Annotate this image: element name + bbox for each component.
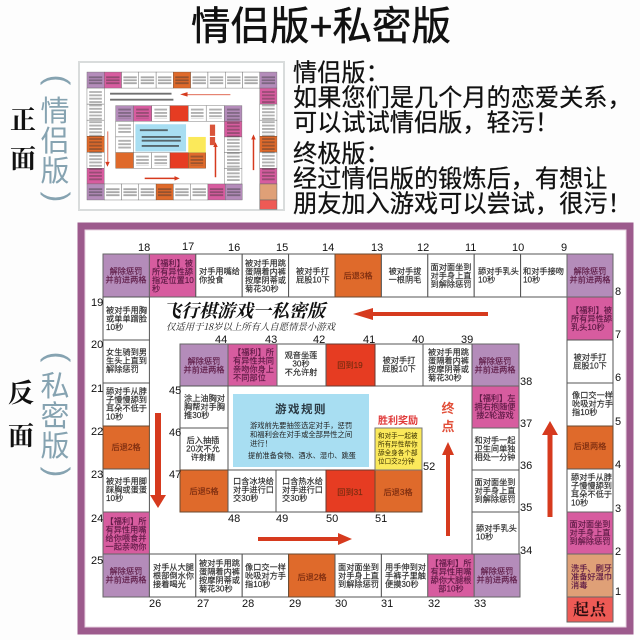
cell 35 [472,470,532,514]
cell 18: 解除惩罚 [110,266,142,276]
cell 47: 后退5格 [189,486,219,496]
cell 15: 菊花30秒 [245,284,279,294]
cell 12: 被对手拔 [389,266,421,276]
cell 34: 10秒 [476,532,493,542]
cell 52: victory reward [375,428,435,473]
label: couple edition vertical: 侣 [40,125,70,158]
cell 15 [242,242,289,297]
board title: 飞行棋游戏一私密版 [163,297,328,323]
cell 3: 10秒 [571,498,588,508]
cell 10 [474,242,524,297]
arrow: top leftward [353,308,488,320]
arrow: right upward [542,421,558,517]
panel: game rules: 进行！ [250,439,272,448]
cell 24: 24 [91,513,103,525]
cell 49: 49 [276,513,288,525]
cell 24: 一起亲吻你 [106,542,146,552]
arrow: left downward [150,413,166,508]
cell 21: 耳朵不低于 [106,403,147,413]
cell 3: 子慢慢舔到 [571,480,612,490]
cell 35: 对手身上直 [475,486,515,496]
cell 2: 到解除惩罚 [570,536,610,546]
cell 35: 面对面坐到 [475,477,515,487]
cell 39: 被对手用跳 [428,347,469,357]
cell 19: 被对手用胸 [106,305,147,315]
cell 27: 27 [197,598,209,610]
cell 7: 乳头10秒 [571,322,605,332]
cell 25: 解除惩罚 [110,566,142,576]
cell 45: 45 [169,385,181,397]
cell 2 [567,512,621,558]
cell 23: 被对手用脚 [106,476,147,486]
cell 20: 生头上直到 [106,356,147,366]
cell 34: 34 [520,545,532,557]
cell 19: 19 [91,297,103,309]
cell 36: 36 [520,460,532,472]
cell 28: 指10秒 [245,579,270,589]
cell 6 [567,340,621,384]
cell 1: 准备好湿巾 [571,572,612,582]
cell 12: 12 [417,242,429,254]
cell 29: 29 [289,598,301,610]
cell 34: 舔对手乳头 [476,523,517,533]
cell 24: 【福利】所 [106,516,146,526]
cell 1 [567,554,621,598]
cell 26: 接着喝光 [153,579,186,589]
cell 28: 吮吸对方手 [245,570,286,580]
cell 33: 33 [474,598,486,610]
arrow: bottom rightward [258,533,352,545]
cell 39 [423,334,473,386]
cell 31: 手裤子里触 [385,570,426,580]
cell 27: 按摩阴蒂或 [199,575,240,585]
cell 21: 舔对手从脖 [106,386,147,396]
cell 4: 4 [615,459,621,471]
cell 46 [169,427,228,470]
cell 35: 35 [520,502,532,514]
cell 35: 到解除惩罚 [475,494,515,504]
cell 48: 交30秒 [233,493,258,503]
cell 10: 10秒 [478,274,495,284]
text block: ultimate edition description: 朋友加入游戏可以尝试，很污！ [293,191,632,218]
cell 41 [326,334,375,386]
cell 26: 26 [149,598,161,610]
cell 50: 回到31 [337,488,363,497]
cell 45 [169,385,228,428]
cell 16: 你投食 [199,274,224,284]
cell 25: 25 [91,555,103,567]
cell 33: 解除惩罚 [481,566,513,576]
cell 48: 48 [228,513,240,525]
cell 3: 舔对手从脖 [571,472,612,482]
cell 8: 并前进两格 [570,274,610,284]
cell 15: 按摩阴蒂或 [245,275,286,285]
cell 32: 【福利】所 [431,558,471,568]
panel: thumbnail of couple edition board [79,62,284,210]
label: back side [8,379,34,451]
cell 49: 交30秒 [282,493,307,503]
label: private edition vertical [40,352,76,477]
cell 11: 对手身上直 [431,270,471,280]
cell 26: 根部倒水你 [153,570,194,580]
cell 52: victory reward: 所有异性帮你 [378,440,418,448]
cell 23: 踩胸或蛋蛋 [106,484,147,494]
cell 44 [180,334,228,386]
cell 30: 对手身上直 [338,570,379,580]
cell 12 [381,242,429,297]
cell 22 [91,426,149,469]
cell 11 [428,242,476,297]
label: couple edition vertical [40,75,76,202]
cell 30 [335,554,381,610]
text block: couple edition description: 如果您们是几个月的恋爱关系， [293,85,632,112]
cell 27: 菊花30秒 [199,584,233,594]
cell 34 [472,512,532,557]
cell 51 [375,470,422,525]
cell 6: 屁股10下 [573,362,607,370]
cell 16: 16 [228,242,240,254]
cell 29: 后退2格 [297,572,327,582]
cell 10: 舔对手乳头 [478,266,519,276]
cell 14 [289,242,335,297]
cell 32: 有异性用嘴 [431,566,471,576]
cell 3: 3 [615,503,621,515]
text block: ultimate edition description: 终极版： [293,141,390,168]
cell 46: 许射精 [191,452,215,462]
cell 21: 子慢慢舔到 [106,394,147,404]
cell 19 [91,297,149,340]
cell 40: 被对手打 [383,355,415,365]
label: private edition vertical: ) [40,467,76,477]
cell 23: 23 [91,469,103,481]
cell 36: 和对手一起 [475,435,515,445]
cell 8 [567,254,621,298]
cell 30: 面对面坐到 [338,562,379,572]
cell 32: 部10秒 [438,584,464,594]
cell 43: 43 [265,334,277,346]
cell 46: 20次不允 [186,444,220,454]
cell 6: 被对手打 [574,352,606,362]
label: couple edition vertical: 情 [40,95,70,128]
label: finish: 终 [441,401,455,416]
cell 45: 推30秒 [184,410,209,420]
cell 5: 像口交一样 [572,390,613,400]
cell 8: 8 [615,286,621,298]
cell 39: 菊花30秒 [428,372,462,382]
cell 44: 44 [215,334,227,346]
label: private edition vertical: 密 [40,400,70,433]
cell 31: 31 [381,598,393,610]
cell 27: 蛋隔着内裤 [199,566,240,576]
cell 11: 11 [465,242,476,254]
title: 情侣版+私密版 [191,5,451,49]
cell 21: 21 [91,383,103,395]
cell 47: 47 [169,469,181,481]
cell 14: 14 [322,242,334,254]
cell 36: 卫生间单独 [475,444,515,454]
cell 15: 15 [276,242,288,254]
cell 21: 10秒 [106,412,123,422]
cell 9 [521,242,567,297]
cell 5 [567,383,621,428]
cell 5: 指10秒 [572,407,597,417]
arrow: middle upward [442,442,454,536]
cell 29 [289,554,335,610]
cell 42: 42 [313,334,325,346]
cell 24: 给你喂食并 [106,533,146,543]
cell 20: 20 [91,339,103,351]
cell 45: 胸帮对手胸 [184,402,225,412]
cell 5: 5 [615,416,621,428]
cell 48: 口含冰块给 [233,476,274,486]
cell 17: 指定位置10 [152,275,194,285]
cell 27: 被对手用跳 [199,558,240,568]
cell 1: 洗手、刷牙 [571,563,612,573]
cell 40: 40 [412,334,424,346]
cell 52: victory reward: 位口交2分钟 [378,456,415,466]
cell 13: 13 [371,242,383,254]
text block: couple edition description [293,60,632,137]
cell 38: 解除惩罚 [479,356,511,366]
panel: game rules [233,394,369,467]
cell 13 [335,242,383,297]
cell 43: 【福利】所 [233,347,274,357]
cell 1: 消毒 [571,580,587,590]
panel: private edition game board [81,226,630,631]
cell 8: 解除惩罚 [574,266,606,276]
cell 22: 后退2格 [111,442,141,452]
text block: ultimate edition description: 经过情侣版的锻炼后，有想让 [293,166,607,193]
cell 52: victory reward: 52 [423,461,435,473]
cell 14: 屁股10下 [296,276,330,284]
cell 23: 10秒 [106,493,123,503]
cell 28 [242,554,289,610]
cell 42 [277,334,326,386]
cell 9: 10秒 [523,274,540,284]
cell 12: 一根阴毛 [389,274,421,284]
cell 39: 按摩阴蒂或 [428,364,469,374]
panel: game rules: 游戏前先要抽签选定对手，惩罚 [250,421,352,430]
heading: victory reward: 胜利奖励 [378,414,418,427]
cell 52: victory reward: 和对手一起被 [378,431,418,440]
cell 50: 50 [326,513,338,525]
cell 19: 10秒 [106,322,123,332]
label: front side: 面 [10,145,36,174]
cell 43: 亲吻你身上 [233,364,274,374]
cell 18: 并前进两格 [106,274,146,284]
cell 4: 后退两格 [574,441,606,451]
start cell [567,597,613,622]
cell 16: 对手用嘴给 [199,266,240,276]
cell 17 [149,241,196,297]
cell 27 [196,554,242,610]
cell 2: 面对面坐到 [570,519,610,529]
cell 7: 7 [615,329,621,341]
cell 33 [474,554,520,610]
cell 15: 被对手用跳 [245,258,286,268]
cell 43: 不同部位 [233,372,266,382]
start cell: 起点 [573,597,607,620]
cell 45: 涂上油胸对 [184,393,225,403]
panel: game rules: 和福利会在对手或全部异性之间 [250,430,352,439]
cell 18 [103,242,150,297]
cell 38 [472,344,532,388]
cell 13: 后退3格 [343,270,373,280]
cell 32: 32 [428,598,440,610]
cell 39: 蛋隔着内裤 [428,356,469,366]
label: front side [10,106,36,174]
cell 26: 对手从大腿 [153,562,194,572]
cell 51: 后退3格 [383,487,413,497]
cell 31: 便摸30秒 [385,579,419,589]
cell 49: 口含热水给 [282,476,323,486]
cell 4 [567,426,621,471]
label: back side: 面 [8,422,34,451]
cell 32: 舔你大腿根 [431,575,471,585]
cell 20 [91,339,149,383]
cell 1: 1 [615,586,621,598]
cell 2: 2 [615,546,621,558]
cell 26 [149,554,196,610]
label: finish: 点 [441,419,455,434]
cell 41: 41 [363,334,375,346]
cell 24 [91,512,149,554]
cell 50 [326,470,375,525]
cell 23 [91,469,149,512]
label: front side: 正 [10,106,36,135]
cell 28: 28 [242,598,254,610]
cell 21 [91,383,149,426]
cell 31: 用手伸到对 [385,562,426,572]
cell 25 [91,554,149,597]
cell 16 [196,242,242,297]
cell 43: 有异性共同 [233,356,274,366]
cell 6: 6 [615,372,621,384]
cell 32 [428,554,474,610]
cell 44: 解除惩罚 [188,356,220,366]
cell 42: 不允许射 [285,367,317,377]
cell 42: 30秒 [292,358,310,368]
cell 11: 面对面坐到 [431,262,471,272]
label: private edition vertical: ( [40,352,76,363]
cell 37: 搂2轮游戏 [476,410,514,420]
cell 22: 22 [91,426,103,438]
cell 44: 并前进两格 [184,364,224,374]
panel: game rules: 提前准备食物、酒水、湿巾、跳蛋 [248,451,356,460]
cell 37: 拥右抱随便 [475,402,515,412]
cell 9: 和对手接吻 [523,266,564,276]
cell 17: 所有异性舔 [152,266,193,276]
cell 33: 并前进两格 [477,574,517,584]
cell 24: 有异性用嘴 [106,524,146,534]
cell 37: 【福利】左 [475,393,515,403]
text block: couple edition description: 可以试试情侣版，轻污！ [293,110,559,137]
cell 2: 对手身上直 [570,528,610,538]
cell 10: 10 [512,242,524,254]
text block: couple edition description: 情侣版： [293,60,390,87]
cell 17: 【福利】被 [152,258,193,268]
label: couple edition vertical: ( [40,75,76,86]
cell 14: 被对手打 [296,266,329,276]
cell 25: 并前进两格 [106,574,146,584]
cell 9: 9 [561,242,567,254]
cell 52: victory reward: 舔全身各个部 [378,448,418,457]
label: private edition vertical: 版 [40,430,70,463]
cell 38: 38 [520,376,532,388]
cell 7: 所有异性舔 [571,314,612,324]
cell 40 [375,334,424,386]
cell 19: 或单单蹭脸 [106,314,148,324]
cell 49: 对手进行口 [282,484,323,494]
cell 5: 吮吸对方手 [572,398,613,408]
cell 37: 37 [520,418,532,430]
label: back side: 反 [8,379,34,408]
cell 18: 18 [138,242,150,254]
cell 15: 蛋隔着内裤 [245,266,286,276]
board subtitle: 仅适用于18岁以上所有人自愿情景小游戏 [166,319,337,333]
cell 36: 相处一分钟 [475,452,515,462]
cell 28: 像口交一样 [245,562,286,572]
cell 31 [381,554,428,610]
cell 39: 39 [461,334,473,346]
label: couple edition vertical: ) [40,192,76,202]
panel: game rules: 游戏规则 [275,402,327,416]
cell 51: 51 [375,513,387,525]
cell 30: 30 [335,598,347,610]
cell 30: 到解除惩罚 [338,579,379,589]
cell 7 [567,297,621,341]
cell 11: 到解除惩罚 [431,279,471,289]
label: couple edition vertical: 版 [40,155,70,188]
cell 20: 女生骑到男 [106,347,147,357]
cell 37 [472,386,532,430]
cell 43 [228,334,277,386]
cell 42: 观音坐莲 [285,350,317,360]
cell 48: 对手进行口 [233,484,274,494]
cell 20: 解除惩罚 [106,364,139,374]
cell 48 [228,470,276,525]
cell 40: 屁股10下 [382,364,416,374]
label: private edition vertical: 私 [40,371,70,403]
cell 46: 46 [169,427,181,439]
cell 41: 回到19 [337,361,363,370]
cell 3 [567,469,621,515]
text block: ultimate edition description [293,141,632,218]
cell 3: 耳朵不低于 [571,489,612,499]
cell 49 [276,470,326,525]
cell 17: 秒 [152,284,160,294]
cell 7: 【福利】被 [571,305,612,315]
cell 38: 并前进两格 [475,364,515,374]
label: finish [441,401,455,434]
cell 47 [169,469,228,512]
cell 36 [472,428,532,472]
cell 46: 后入抽插 [187,435,219,445]
cell 17: 17 [182,241,194,253]
